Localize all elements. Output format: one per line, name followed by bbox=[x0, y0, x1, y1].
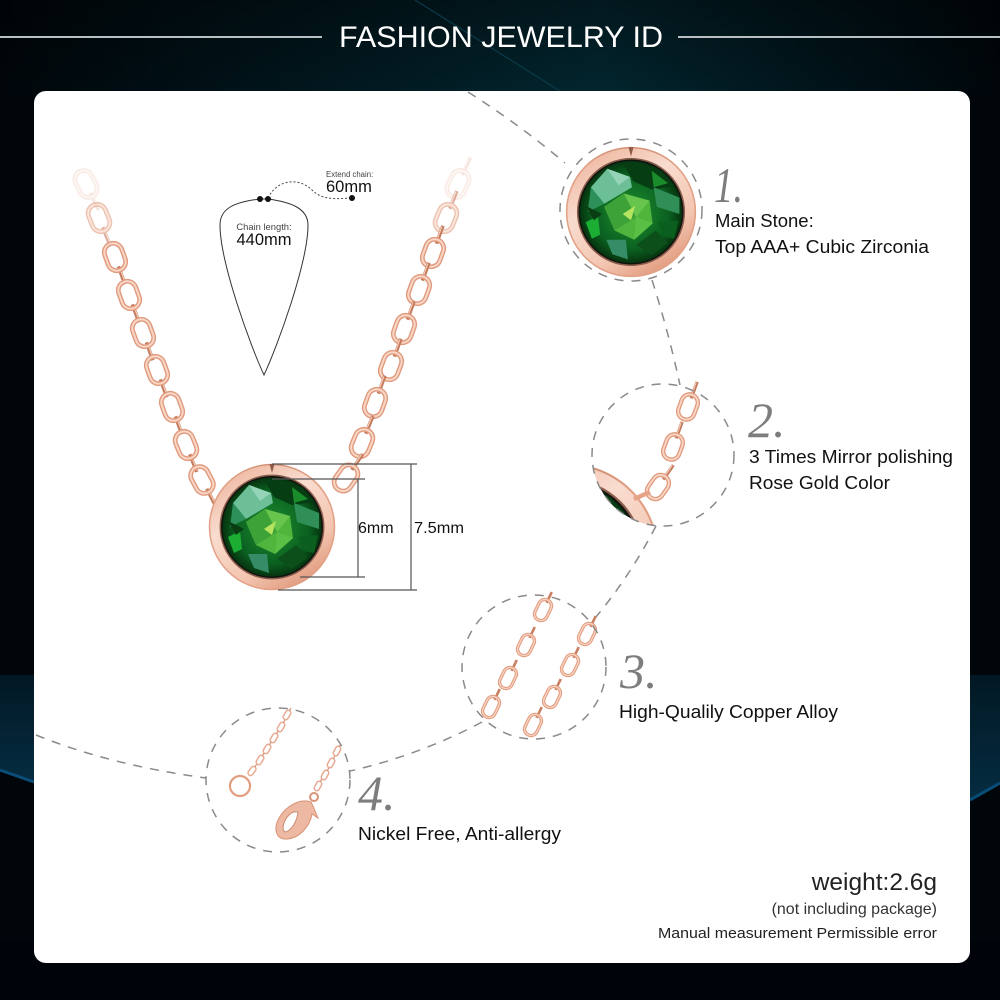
dashed connector lines bbox=[36, 92, 680, 778]
chain length diagram: 60mm bbox=[326, 178, 372, 196]
detail 2: polishing: 2. bbox=[748, 392, 786, 448]
detail 1: main stone: Main Stone: bbox=[715, 210, 814, 231]
weight note: (not including package) bbox=[772, 901, 937, 918]
detail 2: polishing: Rose Gold Color bbox=[749, 472, 890, 493]
detail 3: copper alloy chain: High-Qualily Copper Alloy bbox=[619, 701, 839, 722]
detail 4: nickel free clasp bbox=[206, 707, 562, 852]
detail 1: main stone: Top AAA+ Cubic Zirconia bbox=[715, 236, 930, 257]
dimension lines bbox=[272, 464, 464, 590]
chain length diagram bbox=[220, 170, 373, 375]
chain length diagram: Chain length: bbox=[236, 221, 292, 232]
detail 1: main stone: 1. bbox=[714, 157, 743, 213]
detail 4: nickel free clasp: 4. bbox=[358, 765, 396, 821]
right chain bbox=[331, 154, 478, 495]
detail 1: main stone bbox=[560, 139, 930, 281]
chain length diagram: 440mm bbox=[236, 231, 292, 249]
dimension lines: 7.5mm bbox=[414, 520, 464, 537]
left chain bbox=[72, 167, 224, 510]
dimension lines: 6mm bbox=[358, 520, 394, 537]
detail 3: copper alloy chain bbox=[462, 589, 839, 739]
detail 2: polishing: 3 Times Mirror polishing bbox=[749, 446, 953, 467]
pendant bbox=[209, 464, 335, 590]
main necklace bbox=[72, 154, 478, 590]
weight note bbox=[658, 869, 937, 942]
weight note: weight:2.6g bbox=[811, 869, 937, 896]
chain length diagram: Extend chain: bbox=[326, 170, 373, 179]
detail 4: nickel free clasp: Nickel Free, Anti-allergy bbox=[358, 823, 562, 844]
title: FASHION JEWELRY ID bbox=[339, 21, 663, 54]
weight note: Manual measurement Permissible error bbox=[658, 925, 937, 942]
detail 2: polishing bbox=[591, 381, 952, 527]
detail 3: copper alloy chain: 3. bbox=[619, 643, 658, 699]
